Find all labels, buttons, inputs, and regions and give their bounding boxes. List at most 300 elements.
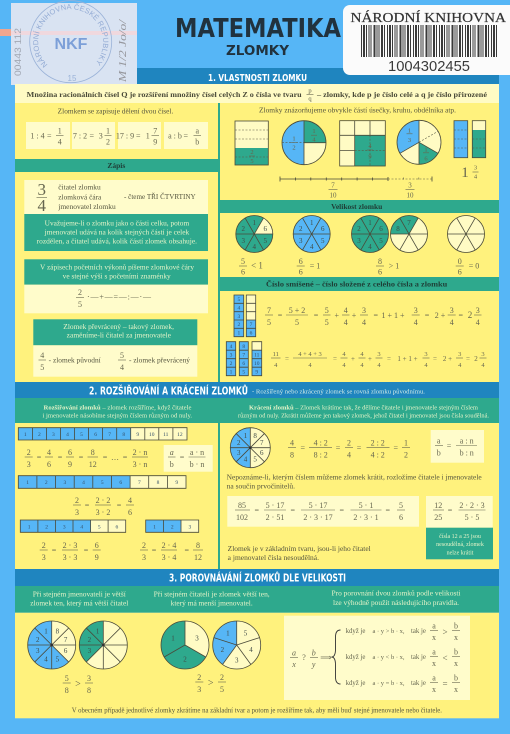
text: prime factorisation: na součin prvočinitelů.: [227, 482, 295, 490]
diagram: rectangle two fifths: 2: [250, 149, 254, 156]
pie: five sixths: 6: [264, 225, 268, 233]
equations: six ninths and eight twelfths: 2 · 4: [162, 541, 176, 550]
teal note: meaning of fraction: rozdělen, a čitatel udává, kolik částí zlomek obsahuje.: [37, 238, 197, 246]
stacked bars: seven fifths: 2: [238, 322, 241, 328]
equation: eleven fourths: 4: [377, 362, 381, 369]
equation: four eighths to one half: 2 : 2: [371, 438, 385, 448]
teal note: reciprocal: zaměníme-li čitatel za jmenovatele: [67, 332, 171, 340]
text: general case note: V obecném případě jednotlivé zlomky zkrátíme na základní tvar a potom je rozšíříme tak, aby měli buď stejné jmenovatele nebo čitatele.: [72, 707, 442, 715]
pie: four eighths: 4: [244, 456, 248, 464]
comparison: two thirds greater than two fifths: >: [208, 678, 214, 689]
equation: two thirds to four sixths: 6: [128, 508, 132, 517]
diagram: circle third and sixth: [397, 120, 441, 164]
bar: three cells: 1: [153, 524, 156, 530]
size comparisons: 5: [241, 257, 245, 266]
equation: seven fifths: =: [425, 311, 430, 320]
pie: five eighths: 1: [44, 628, 48, 636]
diagram: mixed number bars: [454, 121, 486, 181]
intro definition strip: – zlomky, kde p je číslo celé a q je číslo přirozené: [316, 91, 487, 99]
equation: 12 over 25: 5 · 5: [465, 513, 479, 522]
equation: 85 over 102: 2 · 3 · 1: [353, 513, 379, 522]
equations: six ninths and eight twelfths: =: [84, 546, 89, 555]
equation: four eighths to one half: 4 : 2: [314, 438, 328, 448]
diagram: circle half and quarter: 1: [292, 136, 296, 143]
equation: 85 over 102: 6: [399, 513, 403, 522]
bar: six cells: [20, 520, 126, 532]
heading: Zápis: Zápis: [107, 161, 125, 170]
equation: two thirds to four sixths: 4: [128, 496, 132, 505]
pink edge strip: [0, 29, 12, 36]
stacked bars: eleven fourths: 5: [242, 370, 245, 376]
division examples: 1: [146, 132, 150, 140]
bar: nine cells: 2: [45, 480, 48, 486]
general rule: divide: b: [437, 448, 441, 458]
notation box: 3: [37, 180, 46, 199]
division examples: 4: [58, 138, 62, 146]
equation: equal fractions chain: 2 · n: [133, 448, 147, 457]
equation: equal fractions chain: 9: [68, 460, 72, 469]
expression a/x ? b/y: b: [312, 648, 316, 658]
heading: Číslo smíšené: [220, 277, 499, 291]
teal bar: comparison rules: Při stejném čitateli je zlomek větší ten,: [154, 590, 270, 598]
teal bar: comparison rules: [15, 586, 499, 613]
pie: five eighths: 7: [64, 636, 68, 644]
divider between columns: [218, 103, 220, 382]
equations: six ninths and eight twelfths: 12: [194, 553, 202, 562]
comparison: two thirds greater than two fifths: 2: [197, 673, 201, 682]
teal note: fraction bars: ve stejné výši s početními znaménky: [63, 272, 171, 280]
bar: six cells: 3: [63, 524, 66, 530]
library stamp: NÁRODNÍ KNIHOVNA ČESKÉ REPUBLIKY: [33, 3, 108, 68]
equation: 12 over 25: 12: [434, 501, 442, 510]
diagram: circle half and quarter: 2: [292, 145, 296, 152]
equations: six ninths and eight twelfths: 3 · 3: [63, 553, 77, 562]
pie: five eighths: 5: [56, 655, 60, 663]
pie: six sixths: 1: [310, 219, 314, 227]
pie: six sixths: 3: [299, 237, 303, 245]
bar: twelve cells: [18, 428, 187, 440]
equations: six ninths and eight twelfths: 3 · 4: [162, 553, 176, 562]
equation: four eighths to one half: 4: [290, 438, 294, 448]
diagram: number line: [280, 176, 432, 200]
equation: two thirds to four sixths: 2 · 2: [96, 496, 110, 505]
equation: 85 over 102: =: [385, 506, 390, 515]
general rule: multiply: b: [170, 460, 174, 469]
bar: twelve cells: 10: [149, 432, 155, 438]
fraction bar example: [24, 285, 208, 313]
equation: seven fifths: 4: [344, 306, 348, 315]
pie: five sixths: 2: [242, 225, 246, 233]
equation: eleven fourths: 4: [308, 362, 312, 369]
pie: three eighths: 3: [88, 647, 92, 655]
teal note: reciprocal: [33, 319, 197, 345]
notation box: jmenovatel zlomku: [57, 203, 116, 211]
diagram: mixed number bars: 3: [474, 164, 477, 172]
panel: extending fractions: [15, 423, 218, 569]
pie: two extra sixths: 8: [396, 225, 400, 233]
library barcode label: 1004302455: [388, 59, 470, 75]
teal note: coprime: nelze krátit: [447, 550, 474, 556]
rule rows: [346, 622, 460, 694]
equation: 85 over 102: [227, 496, 419, 527]
equation: two thirds to four sixths: [73, 496, 134, 517]
panel: section 1 left: [15, 103, 218, 382]
pie: two extra sixths: 7: [407, 219, 411, 227]
equations: six ninths and eight twelfths: [40, 541, 203, 562]
bar: twelve cells: 1: [24, 432, 27, 438]
bar: nine cells: 1: [26, 480, 29, 486]
equation: seven fifths: =: [314, 311, 319, 320]
pie: five sixths: 1: [253, 219, 257, 227]
teal bar: comparison rules: lze výhodně použít následujícího pravidla.: [333, 599, 459, 607]
teal note: reciprocal: Zlomek převrácený – takový zlomek,: [63, 323, 174, 331]
equation: equal fractions chain: =: [37, 453, 42, 462]
comparison: five eighths greater than three eighths: 5: [65, 674, 69, 683]
equation: four eighths to one half: =: [300, 444, 305, 452]
rule rows: x: [432, 659, 436, 668]
diagram: rectangle two fifths: 5: [250, 158, 254, 165]
equation: seven fifths: 4: [450, 318, 454, 327]
diagram: circle half and quarter: 1: [312, 128, 316, 135]
teal note: meaning of fraction: jmenovatel udává na kolik stejných částí je celek: [44, 228, 190, 236]
pie: five eighths: 6: [64, 647, 68, 655]
diagram: circle third and sixth: 1: [424, 146, 428, 153]
division examples: 1: [58, 126, 62, 136]
equation: seven fifths: 1 + 1 +: [381, 311, 405, 320]
stacked bars: seven fifths: 3: [238, 314, 241, 320]
equations: six ninths and eight twelfths: =: [152, 546, 157, 555]
teal bar: extension and reduction definitions: [15, 398, 499, 423]
notation box: čitatel zlomku: [58, 183, 101, 191]
stacked bars: seven fifths: 6: [250, 330, 253, 336]
stacked bars: eleven fourths: 8: [242, 344, 245, 350]
division examples: 1: [106, 126, 110, 136]
diagram: number line: 10: [330, 192, 337, 200]
comparison: five eighths greater than three eighths: 3: [87, 674, 91, 683]
bar: twelve cells: 7: [108, 432, 111, 438]
equation: 85 over 102: 5 · 17: [266, 501, 284, 510]
notation box: zlomková čára: [58, 193, 102, 201]
stacked bars: eleven fourths: 2: [230, 361, 233, 367]
diagram: circle third and sixth: 3: [408, 137, 411, 144]
rule rows: x: [432, 633, 436, 642]
equation: eleven fourths: 11: [273, 351, 279, 358]
bar: nine cells: 6: [119, 480, 122, 486]
comparison: two thirds greater than two fifths: 5: [220, 685, 224, 694]
expression a/x ? b/y: y: [311, 660, 316, 669]
equation: eleven fourths: 4: [274, 362, 278, 369]
equation: 85 over 102: 85: [238, 501, 246, 510]
equation: 85 over 102: =: [339, 506, 344, 515]
equations: six ninths and eight twelfths: =: [52, 546, 57, 555]
size comparisons: 6: [299, 268, 303, 276]
equations: six ninths and eight twelfths: =: [184, 546, 189, 555]
equation: equal fractions chain: …: [111, 453, 119, 462]
library stamp: M 1/2 Jo/o/: [117, 19, 129, 83]
equation: four eighths to one half: [288, 438, 410, 460]
rule rows: b: [454, 622, 458, 631]
equation: eleven fourths: +: [351, 355, 355, 363]
stacked bars: eleven fourths: 4: [230, 344, 233, 350]
equation: two thirds to four sixths: 3 · 2: [96, 508, 110, 517]
text: division intro: Zlomkem se zapisuje dělení dvou čísel.: [58, 108, 174, 116]
reciprocal example: 5: [40, 363, 44, 372]
stacked bars: eleven fourths: 1: [230, 370, 233, 376]
equation: two thirds to four sixths: =: [117, 501, 122, 510]
general rule: multiply: a: [170, 448, 174, 457]
teal bar: extension and reduction definitions: Rozšiřování zlomků – zlomek rozšíříme, když čitatele: [44, 404, 192, 411]
equation: four eighths to one half: 4 : 2: [371, 450, 385, 460]
equation: eleven fourths: 4: [481, 362, 485, 369]
rule rows: x: [454, 659, 458, 668]
equation: eleven fourths: [271, 351, 486, 369]
equation: eleven fourths: +: [368, 355, 372, 363]
pie: four eighths: [230, 428, 270, 468]
equation: equal fractions chain: 8: [91, 448, 95, 457]
equation: eleven fourths: 4: [424, 362, 428, 369]
equation: two thirds to four sixths: 3: [75, 508, 79, 517]
comparison: five eighths greater than three eighths: >: [75, 679, 81, 690]
equations: six ninths and eight twelfths: 8: [196, 541, 200, 550]
equation: eleven fourths: 3: [424, 351, 428, 358]
equation: seven fifths: =: [278, 311, 283, 320]
equation: eleven fourths: 3: [458, 351, 461, 358]
equation: 85 over 102: 102: [236, 513, 248, 522]
equation: seven fifths: 5: [295, 318, 299, 327]
equation: 85 over 102: 5 · 17: [309, 501, 327, 510]
rule rows: a: [432, 622, 436, 631]
pie: empty: [448, 216, 484, 252]
intro definition strip: [15, 84, 499, 103]
comparison: five eighths greater than three eighths: 8: [65, 686, 69, 695]
equation: equal fractions chain: =: [58, 453, 63, 462]
equations: six ninths and eight twelfths: 6: [95, 541, 99, 550]
equation: 12 over 25: 25: [434, 513, 442, 522]
rule rows: a: [432, 674, 436, 683]
pie: full teal: 1: [368, 219, 372, 227]
equations: six ninths and eight twelfths: 9: [95, 553, 99, 562]
size comparisons: 6: [458, 268, 462, 276]
equation: 85 over 102: 5: [399, 501, 403, 510]
section bar 3: [15, 569, 499, 586]
equations: six ninths and eight twelfths: 2 · 3: [63, 541, 77, 550]
stacked bars: eleven fourths: 10: [254, 361, 260, 367]
text: basic form: [228, 545, 371, 562]
fraction bar example: · — + — = — : — · —: [87, 292, 152, 302]
equation: eleven fourths: 2: [474, 355, 478, 363]
equation: eleven fourths: =: [333, 355, 337, 363]
division examples: 7 : 2: [73, 132, 87, 140]
equation: seven fifths: 4: [362, 318, 366, 327]
equation: eleven fourths: 2 +: [443, 355, 452, 363]
teal bar: extension and reduction definitions: i jmenovatele násobíme stejným číslem různým od nuly.: [42, 412, 192, 419]
bar: nine cells: 7: [138, 480, 141, 486]
equation: equal fractions chain: =: [103, 453, 108, 462]
pie: five eighths: 2: [36, 636, 40, 644]
reciprocal example: - zlomek převrácený: [129, 356, 191, 364]
heading: Zápis: [15, 159, 218, 172]
bar: twelve cells: 4: [66, 432, 69, 438]
equation: four eighths to one half: 8: [290, 450, 294, 460]
equation: four eighths to one half: =: [393, 444, 398, 452]
expression a/x ? b/y: ?: [302, 653, 306, 662]
equation: equal fractions chain: 6: [47, 460, 51, 469]
pie: two thirds: 3: [195, 634, 199, 642]
equation: eleven fourths: =: [285, 355, 289, 363]
size comparisons: 6: [299, 257, 303, 266]
diagram: grid four ninths: 4: [368, 143, 372, 150]
diagram: grid four ninths: [340, 121, 385, 166]
rule rows: když je: [346, 680, 365, 687]
bar: six cells: 6: [116, 524, 119, 530]
pie: two fifths: 4: [249, 646, 253, 654]
pie: four eighths: 2: [237, 439, 241, 447]
bar: twelve cells: 8: [122, 432, 125, 438]
bar: nine cells: 9: [175, 480, 178, 486]
rule rows: a · y < b · x,: [372, 654, 405, 661]
section bar 1: [15, 68, 499, 84]
equation: seven fifths: 3: [362, 306, 366, 315]
pie: full teal: 4: [368, 243, 372, 251]
pie: five eighths: 3: [36, 647, 40, 655]
pie: four eighths: 1: [244, 432, 248, 440]
text: prime factorisation: Nepoznáme-li, kterým číslem můžeme zlomek krátit, rozložíme čitatele i jmenovatele: [227, 473, 482, 481]
equation: four eighths to one half: 4: [347, 450, 351, 460]
pie: five eighths: [28, 621, 76, 669]
stacked bars: seven fifths: 7: [250, 322, 253, 328]
library stamp: [11, 0, 137, 85]
equation: eleven fourths: 1 + 1 +: [397, 355, 418, 363]
general rule: multiply: a · n: [190, 448, 204, 457]
general rule: divide: a: [437, 436, 441, 446]
intro definition strip: Množina racionálních čísel Q je rozšíření množiny čísel celých Z o čísla ve tvaru: [27, 91, 302, 99]
expression a/x ? b/y: x: [291, 660, 296, 669]
heading: main title: MATEMATIKA: [175, 14, 341, 44]
diagram: grid four ninths: 9: [368, 154, 372, 160]
equations: six ninths and eight twelfths: 2: [42, 541, 46, 550]
division examples: =: [136, 132, 141, 140]
equation: equal fractions chain: 6: [68, 448, 72, 457]
teal bar: extension and reduction definitions: Krácení zlomků – Zlomek krátíme tak, že dělíme čitatele i jmenovatele stejným číslem: [249, 404, 478, 411]
pie: three eighths: [79, 621, 127, 669]
rule rows: x: [432, 685, 436, 694]
equation: four eighths to one half: =: [357, 444, 362, 452]
pie: six sixths: 2: [299, 225, 303, 233]
comparison: five eighths greater than three eighths: [63, 674, 93, 695]
division examples: 7: [153, 126, 157, 136]
teal note: coprime: nesoudělná, zlomek: [436, 542, 484, 548]
equation: four eighths to one half: 1: [404, 438, 408, 448]
equation: seven fifths: 5: [325, 306, 329, 315]
reciprocal example: 4: [40, 351, 44, 360]
teal note: fraction bars: [24, 259, 208, 285]
intro definition strip: q: [308, 96, 312, 102]
diagram: mixed number bars: 4: [474, 174, 478, 180]
reciprocal example: 5: [120, 351, 124, 360]
teal bar: extension and reduction definitions: různým od nuly. Zkrátit můžeme jen takový zlomek, jehož čitatel i jmenovatel jsou čísla soudělná.: [238, 412, 489, 419]
bar: twelve cells: 5: [80, 432, 83, 438]
equation: four eighths to one half: 2: [404, 450, 408, 460]
text: basic form: Zlomek je v základním tvaru, jsou-li jeho čitatel: [228, 545, 371, 553]
division examples: 1 : 4: [30, 132, 45, 140]
equation: 12 over 25: 2 · 2 · 3: [459, 501, 485, 510]
bar: twelve cells: 12: [177, 432, 183, 438]
teal note: fraction bars: V zápisech početních výkonů píšeme zlomkové čáry: [40, 263, 195, 271]
rule rows: b: [454, 674, 458, 683]
equation: equal fractions chain: =: [79, 453, 84, 462]
bar: twelve cells: 9: [136, 432, 139, 438]
heading: Velikost zlomku: [220, 200, 499, 213]
pie: six sixths: 4: [310, 243, 314, 251]
teal bar: comparison rules: který má menší jmenovatel.: [171, 599, 253, 607]
equation: seven fifths: 3: [450, 306, 454, 315]
equation: seven fifths: =: [373, 311, 378, 320]
pie: two fifths: 1: [226, 629, 230, 637]
diagram: circle half and quarter: [282, 121, 326, 165]
equation: eleven fourths: =: [466, 355, 470, 363]
pie: five sixths: 4: [253, 243, 257, 251]
size comparisons: = 0: [469, 262, 479, 270]
equation: 85 over 102: 2 · 3 · 17: [303, 513, 333, 522]
general rule: multiply: [164, 445, 213, 472]
comparison: five eighths greater than three eighths: 8: [87, 686, 91, 695]
bar: six cells: 2: [45, 524, 48, 530]
heading: main title: [175, 14, 341, 59]
pie: five sixths: 5: [264, 237, 268, 245]
teal note: coprime: [426, 528, 493, 559]
equation: equal fractions chain: [25, 448, 148, 469]
pie: full teal: 6: [379, 225, 383, 233]
reciprocal example: 4: [120, 363, 124, 372]
equation: seven fifths: =: [458, 311, 463, 320]
equation: eleven fourths: 4: [342, 351, 346, 358]
equation: eleven fourths: 3: [377, 351, 381, 358]
general rule: divide: a : n: [460, 436, 474, 446]
panel: comparing fractions: [15, 613, 499, 718]
text: prime factorisation: [227, 473, 482, 490]
bar: three cells: 3: [189, 524, 192, 530]
pie: two fifths: 2: [221, 646, 225, 654]
bar: six cells: 1: [28, 524, 31, 530]
pie: two fifths: [213, 621, 261, 669]
stacked bars: seven fifths: 1: [238, 330, 241, 336]
bar: six cells: 5: [98, 524, 101, 530]
pie: two fifths: 5: [244, 629, 248, 637]
equations: six ninths and eight twelfths: 2: [142, 541, 146, 550]
divider between columns: [218, 423, 220, 569]
pie: two extra sixths: [390, 216, 428, 252]
stacked bars: eleven fourths: 6: [242, 361, 245, 367]
pie: six sixths: [293, 216, 330, 252]
equation: equal fractions chain: 2: [27, 448, 31, 457]
equation: four eighths to one half: 2: [347, 438, 351, 448]
bar: nine cells: 5: [101, 480, 104, 486]
teal bar: comparison rules: zlomek ten, který má větší čitatel: [30, 599, 128, 607]
expression a/x ? b/y: [290, 648, 332, 669]
division examples: 17 : 9: [116, 132, 134, 140]
pie: five sixths: [236, 216, 273, 253]
stacked bars: eleven fourths: [226, 342, 262, 376]
general rule: multiply: =: [180, 453, 185, 462]
general rule: multiply: b · n: [190, 460, 204, 469]
pie: two thirds: [161, 621, 209, 669]
general rule: divide: b : n: [460, 448, 474, 458]
division examples: a: [196, 126, 200, 136]
equation: seven fifths: 2 +: [435, 311, 446, 320]
rule rows: a · y = b · x,: [372, 680, 405, 687]
size comparisons: < 1: [251, 260, 263, 270]
equation: 85 over 102: 5 · 1: [359, 501, 373, 510]
